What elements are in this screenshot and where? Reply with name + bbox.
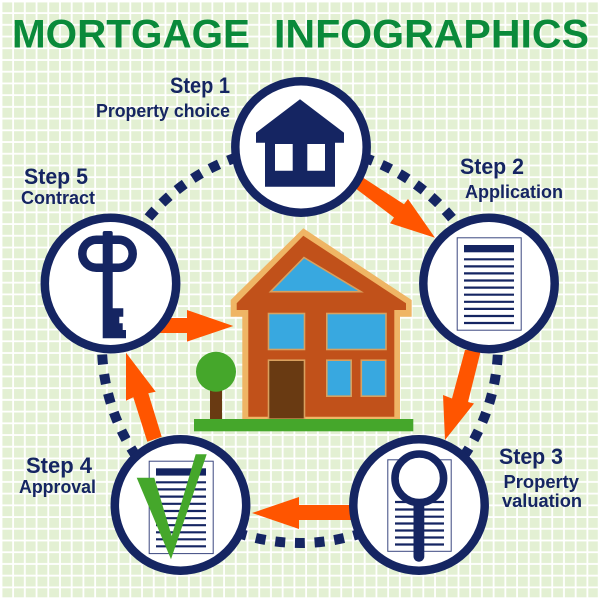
- label: step 2: [460, 154, 563, 202]
- house brick body: [237, 236, 406, 417]
- label: step 3: valuation: [502, 491, 582, 511]
- label: step 2: Step 2: [460, 154, 524, 179]
- label: step 1: Step 1: [170, 73, 230, 98]
- label: step 3: [499, 444, 582, 511]
- label: step 1: Property choice: [96, 101, 230, 121]
- title: MORTGAGE: [12, 12, 250, 56]
- label: step 1: [96, 73, 230, 121]
- door: [268, 360, 304, 419]
- tree: [196, 352, 236, 420]
- label: step 5: [21, 164, 95, 208]
- dotted ring connecting the steps: [102, 147, 498, 543]
- label: step 4: Step 4: [26, 453, 93, 478]
- label: step 4: Approval: [19, 477, 96, 497]
- arrow: step 3 to step 4: [252, 497, 353, 529]
- arrow: step 1 to step 2: [355, 177, 435, 238]
- label: step 5: Step 5: [24, 164, 88, 189]
- arrow: step 5 to house: [160, 310, 233, 342]
- lower left window: [327, 360, 351, 396]
- step 4 circle with checked document icon: [115, 439, 246, 571]
- arrow: step 4 to step 5: [126, 353, 162, 442]
- central house illustration: [194, 228, 413, 431]
- label: step 3: Step 3: [499, 444, 563, 469]
- upper right window: [327, 314, 386, 350]
- step 2 circle with document icon: [423, 218, 555, 349]
- step 1 circle with house icon: [235, 81, 367, 213]
- upper left window: [268, 314, 304, 350]
- label: step 4: [19, 453, 96, 497]
- attic window: [270, 258, 361, 292]
- title: INFOGRAPHICS: [274, 12, 589, 56]
- grass: [194, 419, 413, 431]
- label: step 3: Property: [504, 472, 579, 492]
- step 5 circle with key icon: [45, 218, 176, 349]
- arrow: step 2 to step 3: [443, 350, 481, 440]
- label: step 2: Application: [465, 182, 563, 202]
- step 3 circle with magnifier icon: [353, 439, 485, 571]
- label: step 5: Contract: [21, 188, 95, 208]
- lower right window: [361, 360, 386, 396]
- title: [12, 12, 589, 56]
- house outline: [231, 228, 412, 419]
